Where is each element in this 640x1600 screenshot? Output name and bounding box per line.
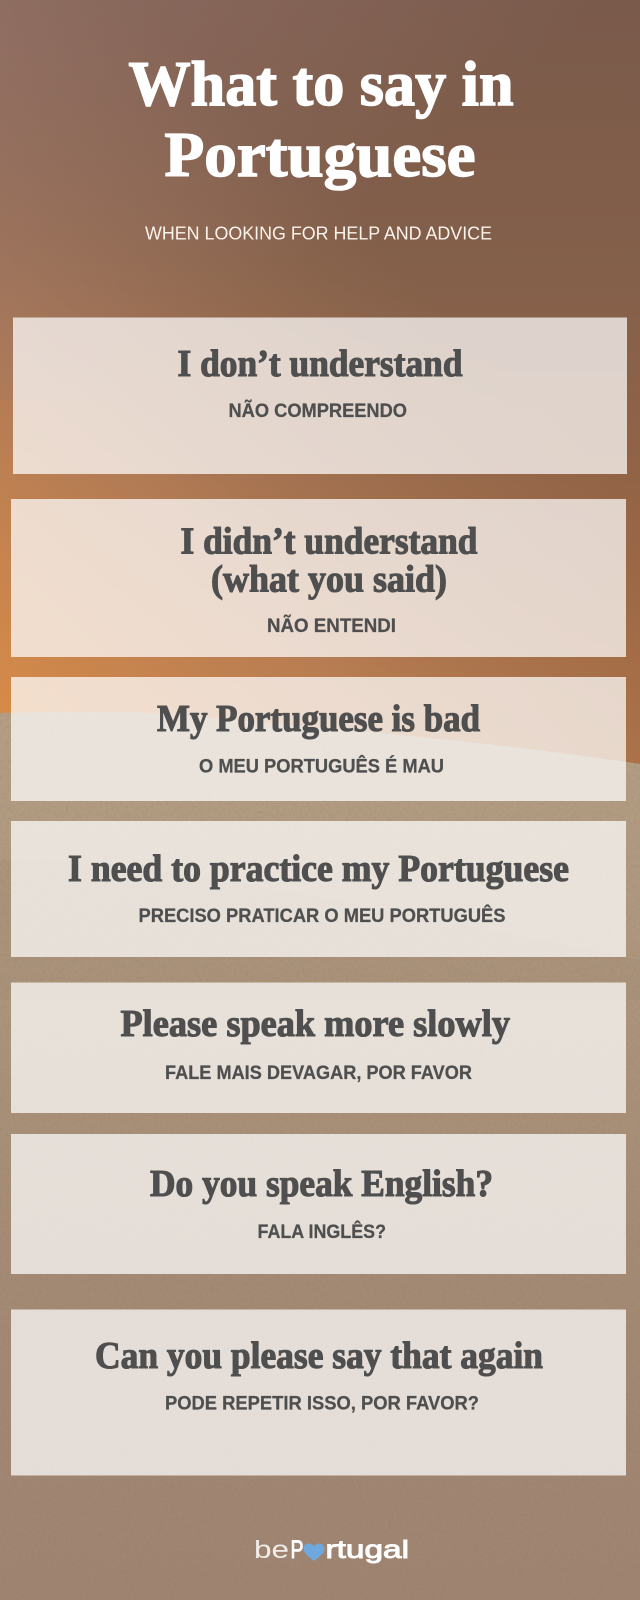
panel: I need to practice my Portuguese — [11, 821, 626, 957]
subtitle: WHEN LOOKING FOR HELP AND ADVICE — [145, 222, 492, 244]
panel: Do you speak English?: Do you speak English? — [150, 1163, 493, 1205]
panel: I didn't understand: I didn’t understand — [180, 520, 478, 562]
panel: I don't understand: NÃO COMPREENDO — [228, 399, 407, 422]
title — [128, 48, 514, 190]
panel: My Portuguese is bad — [11, 677, 626, 801]
panel: I didn't understand: NÃO ENTENDI — [267, 614, 396, 637]
background: sand dune — [0, 712, 640, 1600]
panel: I don't understand: I don’t understand — [178, 343, 462, 385]
panel: I don't understand — [13, 318, 627, 474]
panel: I didn't understand — [11, 499, 626, 657]
panel: I need to practice my Portuguese: I need to practice my Portuguese — [68, 848, 569, 890]
logo: bePortugal: rtugal — [326, 1536, 409, 1564]
panel: I need to practice my Portuguese: PRECISO PRATICAR O MEU PORTUGUÊS — [138, 903, 506, 927]
background: sky — [0, 0, 640, 800]
logo: bePortugal: P — [290, 1536, 304, 1564]
background: sky highlight — [0, 0, 640, 400]
background: sand grain — [0, 713, 640, 1600]
panel: Please speak more slowly: FALE MAIS DEVAGAR, POR FAVOR — [165, 1062, 472, 1084]
panel: Can you please say that again: PODE REPETIR ISSO, POR FAVOR? — [165, 1392, 479, 1414]
background: orange glow — [0, 0, 640, 800]
panel: Do you speak English?: FALA INGLÊS? — [258, 1219, 386, 1243]
icon: blue heart — [304, 1544, 324, 1561]
panel: Do you speak English? — [11, 1134, 626, 1274]
panel: Can you please say that again — [11, 1310, 626, 1476]
panel: My Portuguese is bad: My Portuguese is bad — [157, 698, 480, 740]
title: What to say in — [128, 48, 514, 119]
panel: Please speak more slowly: Please speak more slowly — [120, 1003, 510, 1045]
panel: My Portuguese is bad: O MEU PORTUGUÊS É MAU — [199, 754, 444, 778]
title: Portuguese — [164, 119, 476, 190]
panel: Please speak more slowly — [11, 982, 626, 1113]
logo: bePortugal: be — [254, 1536, 289, 1564]
logo: bePortugal — [254, 1536, 409, 1564]
panel: I didn't understand: (what you said) — [211, 558, 447, 600]
background: darker dune shadow — [0, 860, 640, 1000]
panel: Can you please say that again: Can you please say that again — [95, 1335, 543, 1377]
